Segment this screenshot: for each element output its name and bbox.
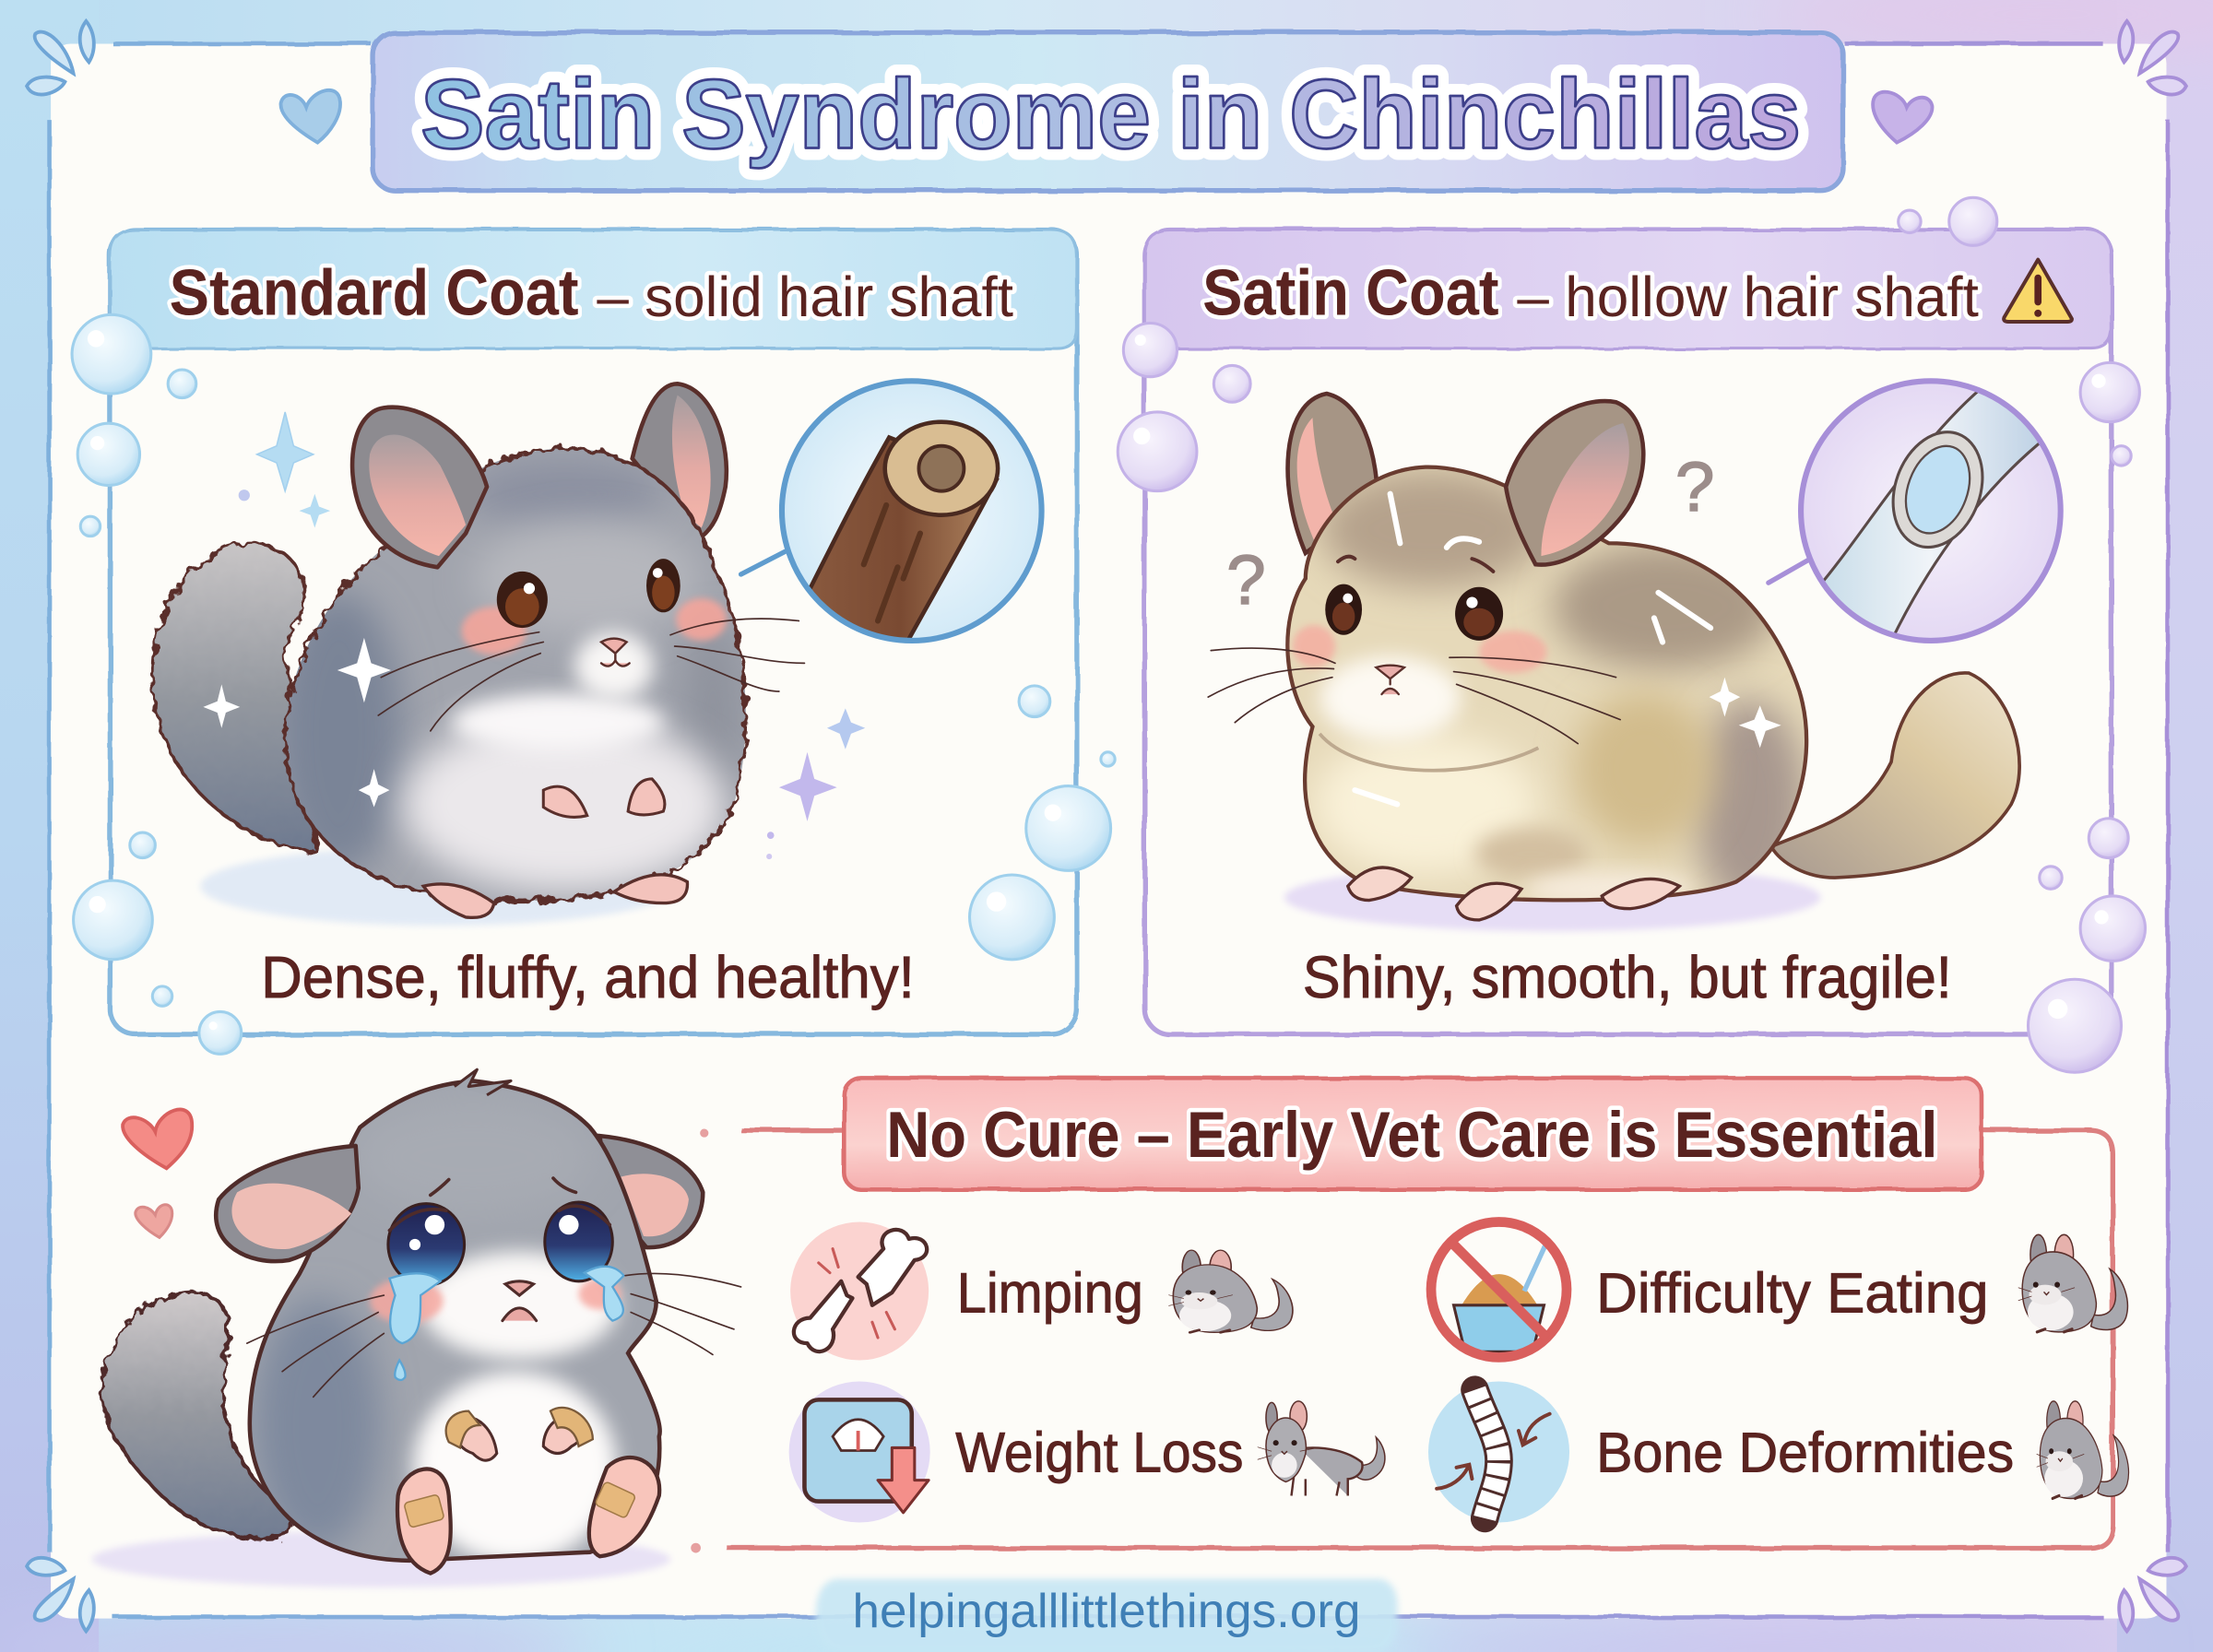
callout: solid hair shaft: [741, 381, 1042, 663]
heading: no cure: No Cure – Early Vet Care is Essential: [886, 1098, 1938, 1171]
floor shadow: [1284, 864, 1820, 931]
heading: standard coat: [170, 255, 1013, 328]
mini chinchilla: [1258, 1401, 1385, 1495]
feet: [1348, 867, 1679, 920]
panel header: satin coat: [1144, 230, 2112, 348]
mini chinchilla: [2018, 1234, 2127, 1332]
question marks: [1226, 448, 1714, 620]
icon: warning triangle: [2004, 260, 2072, 322]
tail: [152, 543, 317, 852]
label: Difficulty Eating: [1596, 1261, 1989, 1324]
icon: blue heart: [281, 90, 340, 143]
heading: standard coat: – solid hair shaft: [597, 266, 1013, 328]
label: Weight Loss: [955, 1421, 1243, 1483]
footer: website: helpingalllittlethings.org: [852, 1585, 1361, 1638]
bubbles: purple: [1118, 197, 2146, 1072]
sparkles: blue and purple stars: [239, 412, 865, 859]
corner flourish: bottom left: [27, 1558, 94, 1631]
icon: no food: [1431, 1222, 1567, 1357]
tail: [1771, 673, 2019, 878]
icon: small heart: [136, 1205, 172, 1237]
eyes: [1325, 584, 1503, 641]
icon: scale with arrow: [789, 1381, 930, 1523]
sparkles: [203, 638, 391, 808]
label: Bone Deformities: [1596, 1421, 2014, 1483]
symptom: bone deformities: [1428, 1381, 2128, 1523]
feet: [423, 875, 687, 917]
eyes: [497, 559, 680, 628]
title banner: [373, 32, 1843, 191]
panel: satin coat: [1144, 230, 2112, 1034]
chinchilla: standard: [152, 384, 804, 917]
heading: satin coat: – hollow hair shaft: [1517, 266, 1979, 328]
bandaged feet: [397, 1457, 659, 1574]
paws: [543, 779, 665, 817]
heading: satin coat: [1202, 255, 1979, 328]
whiskers: [247, 1273, 741, 1397]
sparkles on coat: [1710, 678, 1781, 748]
corner flourish: top right: [2119, 21, 2186, 95]
label: Limping: [957, 1261, 1143, 1324]
body: [250, 1069, 660, 1564]
floor shadow: [91, 1531, 670, 1587]
nose and mouth: [503, 1281, 537, 1321]
nose and mouth: [601, 639, 630, 667]
red frame line: [727, 1130, 2112, 1548]
title: Satin Syndrome in Chinchillas: [420, 59, 1801, 170]
icon: red heart: [123, 1110, 192, 1168]
panel: no cure warning: [691, 1078, 2128, 1552]
chinchilla: sad with bandages: [91, 1069, 741, 1587]
eyes: [388, 1202, 612, 1285]
question marks: ?: [1675, 448, 1714, 526]
panel header: standard coat: [110, 230, 1077, 348]
tail: [102, 1292, 299, 1540]
callout: hollow hair shaft: [1769, 381, 2061, 656]
question marks: ?: [1226, 541, 1266, 620]
icon: spine: [1428, 1381, 1569, 1523]
chinchilla: satin: [1208, 394, 2019, 920]
cheeks: [370, 1279, 621, 1324]
brows: [1338, 557, 1493, 572]
caption: standard coat: Dense, fluffy, and healthy!: [261, 944, 915, 1010]
fluffy body: [275, 448, 746, 901]
right ear: [633, 384, 727, 539]
whiskers: [378, 619, 804, 731]
floor shadow: [200, 846, 680, 926]
panel: standard coat: [110, 230, 1077, 1034]
right ear: [1506, 401, 1643, 565]
left ear: [216, 1146, 359, 1261]
symptom: difficulty eating: [1431, 1222, 2127, 1357]
bandaged paws: [446, 1408, 593, 1460]
brows: [389, 1178, 609, 1231]
nose and mouth: [1376, 666, 1404, 694]
heading: satin coat: Satin Coat: [1202, 255, 1499, 328]
cheeks: [1293, 625, 1547, 673]
left ear: [352, 407, 487, 567]
cheeks: [462, 598, 727, 655]
symptom: weight loss: [789, 1381, 1385, 1523]
icon: purple heart: [1873, 92, 1932, 143]
corner flourish: top left: [27, 21, 94, 95]
caption: satin coat: Shiny, smooth, but fragile!: [1303, 944, 1952, 1010]
symptom: limping: [790, 1222, 1293, 1361]
left ear: [1288, 394, 1378, 553]
tears: [389, 1267, 624, 1380]
smooth body: [1287, 467, 1806, 910]
corner flourish: bottom right: [2119, 1558, 2186, 1631]
footer: website: [816, 1579, 1398, 1652]
red dots: [691, 1128, 708, 1552]
bubbles: blue: [72, 314, 1115, 1054]
heading: standard coat: Standard Coat: [170, 255, 579, 328]
right ear: [600, 1136, 703, 1247]
banner: [844, 1078, 1982, 1189]
whiskers: [1208, 648, 1620, 744]
mini chinchilla: [2037, 1401, 2128, 1498]
title: Satin Syndrome in Chinchillas: [420, 59, 1801, 170]
mini chinchilla: [1168, 1250, 1293, 1332]
icon: broken bone: [790, 1222, 929, 1361]
